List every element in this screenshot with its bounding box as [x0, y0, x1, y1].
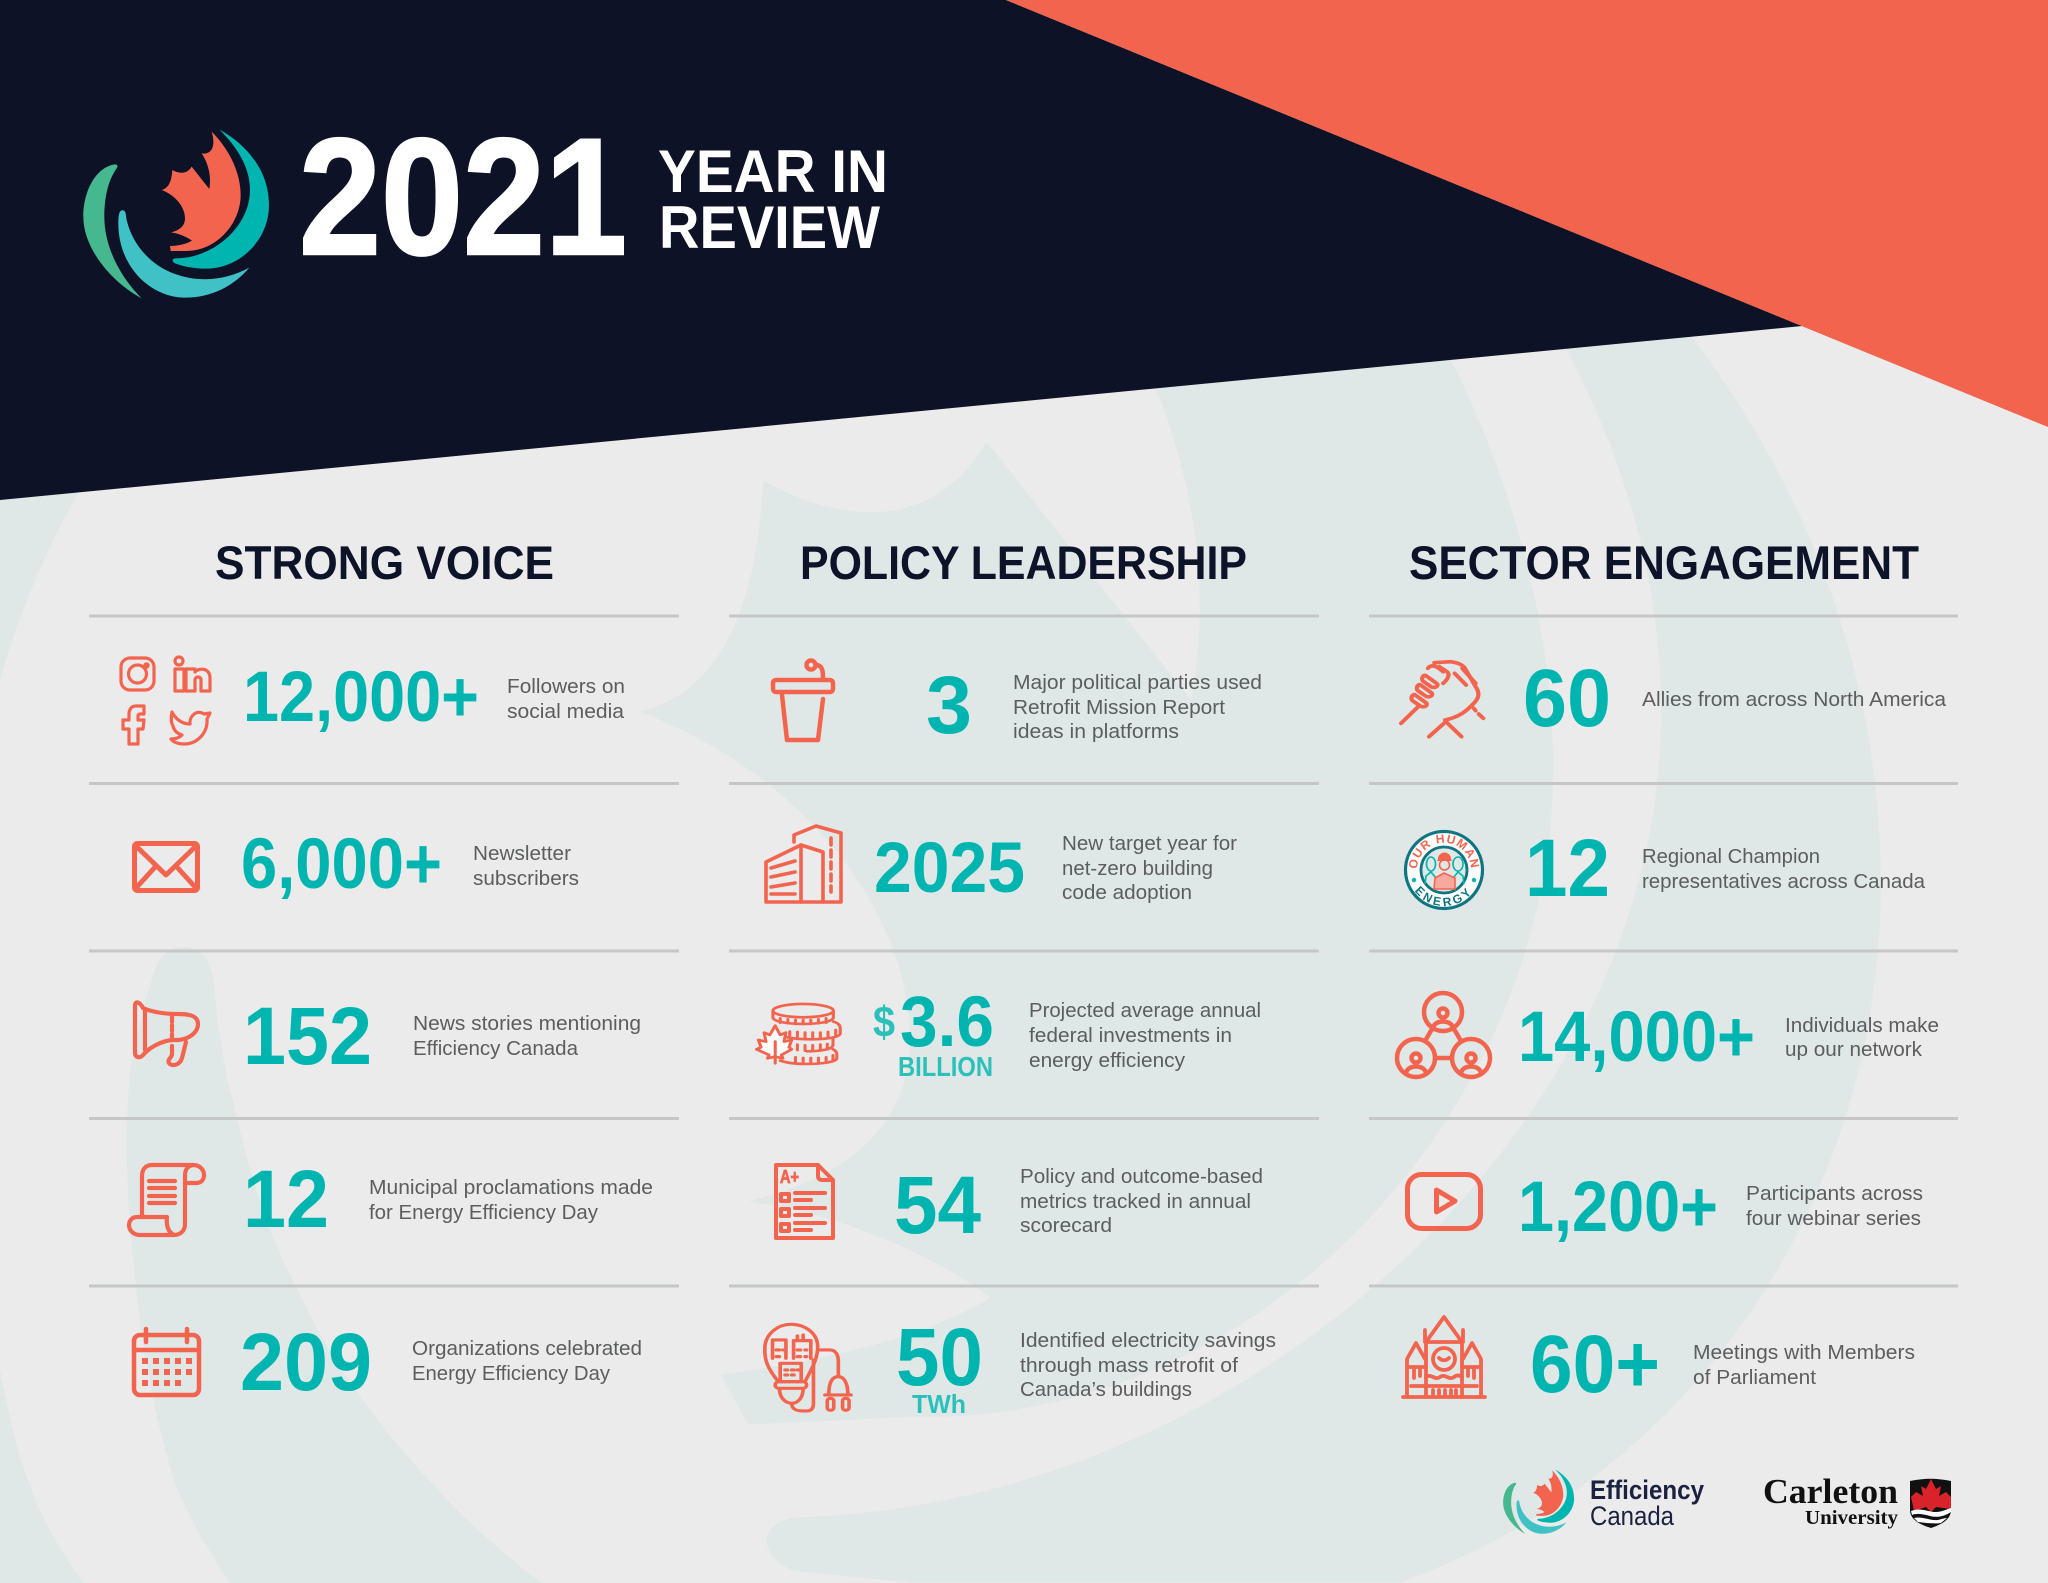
footer logo: efficiency canada: Canada — [1590, 1501, 1675, 1531]
description: Municipal proclamations made — [369, 1176, 653, 1199]
row: allies — [1401, 653, 1947, 744]
icon: calendar — [134, 1329, 199, 1395]
icon: network of people — [1397, 993, 1490, 1077]
icon: coins with maple leaf — [756, 1004, 840, 1064]
description: Efficiency Canada — [413, 1037, 579, 1060]
title: year in review: REVIEW — [659, 194, 880, 261]
number: 12 — [1525, 823, 1610, 914]
description: of Parliament — [1693, 1366, 1816, 1389]
description — [473, 842, 579, 890]
icon: scroll — [129, 1165, 204, 1235]
icon: our human energy badge: OUR HUMAN — [1409, 834, 1480, 868]
description: Individuals make — [1785, 1014, 1939, 1037]
description — [1693, 1341, 1915, 1389]
description — [1020, 1329, 1276, 1401]
icon: parliament building — [1403, 1317, 1485, 1397]
number: 3 — [926, 660, 972, 751]
row: newsletter — [134, 825, 579, 904]
unit: dollar sign: $ — [873, 998, 895, 1047]
row: target year — [766, 826, 1237, 908]
row: political parties — [773, 660, 1262, 751]
icon: envelope — [134, 844, 198, 890]
number: 209 — [240, 1317, 372, 1408]
row: webinars — [1408, 1168, 1923, 1247]
description: metrics tracked in annual — [1020, 1190, 1251, 1213]
number: 60 — [1523, 653, 1611, 744]
description — [1020, 1165, 1263, 1237]
number: 54 — [894, 1160, 981, 1251]
description — [369, 1176, 653, 1224]
description: net-zero building — [1062, 857, 1213, 880]
description: representatives across Canada — [1642, 870, 1926, 893]
icon: report card — [776, 1165, 833, 1238]
description: Projected average annual — [1029, 999, 1261, 1022]
description — [413, 1012, 641, 1060]
description — [1029, 999, 1261, 1072]
description: Energy Efficiency Day — [412, 1362, 611, 1385]
icon: building — [766, 826, 841, 902]
heading: policy leadership: POLICY LEADERSHIP — [800, 537, 1247, 590]
unit: TWh: TWh — [912, 1389, 966, 1419]
description: Identified electricity savings — [1020, 1329, 1276, 1352]
icon: clasped hands — [1401, 662, 1483, 737]
icon: video play — [1408, 1174, 1480, 1228]
unit: billion: BILLION — [898, 1051, 993, 1082]
description — [507, 675, 625, 723]
description: ideas in platforms — [1013, 720, 1179, 743]
description: code adoption — [1062, 881, 1192, 904]
panel: strong voice — [89, 537, 679, 1408]
title: year in review — [658, 138, 888, 261]
row: parliament — [1403, 1317, 1915, 1410]
description: subscribers — [473, 867, 579, 890]
header orange triangle — [1006, 0, 2048, 427]
header dark banner — [0, 0, 1802, 500]
row: network — [1397, 993, 1939, 1077]
footer logo: efficiency canada — [1503, 1469, 1704, 1534]
row: followers — [121, 657, 625, 744]
heading: sector engagement: SECTOR ENGAGEMENT — [1409, 537, 1919, 590]
description: federal investments in — [1029, 1024, 1232, 1047]
row: news stories — [135, 991, 641, 1082]
title: 2021: 2021 — [299, 105, 627, 290]
footer logo: carleton university: Carleton — [1763, 1472, 1898, 1511]
description: for Energy Efficiency Day — [369, 1201, 599, 1224]
icon: podium — [773, 660, 833, 740]
number: 12 — [243, 1154, 329, 1245]
description: Organizations celebrated — [412, 1337, 642, 1360]
description: up our network — [1785, 1038, 1923, 1061]
icon: report card: A+ — [780, 1167, 799, 1187]
icon: our human energy badge — [1404, 830, 1484, 910]
description: Meetings with Members — [1693, 1341, 1915, 1364]
description: social media — [507, 700, 625, 723]
description — [1785, 1014, 1939, 1061]
number: 152 — [243, 991, 372, 1082]
panel: sector engagement — [1369, 537, 1958, 1410]
description: Allies from across North America — [1642, 688, 1947, 711]
description: energy efficiency — [1029, 1049, 1186, 1072]
icon: our human energy badge: ENERGY — [1414, 886, 1470, 906]
footer logo: efficiency canada: Efficiency — [1590, 1475, 1704, 1505]
number: 6,000+ — [241, 825, 442, 904]
number: 12,000+ — [243, 658, 479, 737]
description: Followers on — [507, 675, 625, 698]
description — [1062, 832, 1237, 904]
number: 50 — [896, 1312, 983, 1403]
description: Canada’s buildings — [1020, 1378, 1192, 1401]
description — [412, 1337, 642, 1385]
description: New target year for — [1062, 832, 1237, 855]
description: through mass retrofit of — [1020, 1354, 1238, 1377]
heading: strong voice: STRONG VOICE — [215, 537, 554, 590]
row: federal investment — [756, 983, 1261, 1082]
icon: social media — [121, 657, 210, 744]
description: News stories mentioning — [413, 1012, 641, 1035]
description: Regional Champion — [1642, 845, 1820, 868]
number: 2025 — [874, 829, 1025, 908]
footer logo: carleton university — [1763, 1472, 1951, 1529]
description: Major political parties used — [1013, 671, 1262, 694]
description — [1642, 845, 1926, 893]
panel: policy leadership — [729, 537, 1319, 1419]
row: organizations — [134, 1317, 642, 1408]
icon: megaphone — [135, 1002, 198, 1065]
row: electricity savings — [765, 1312, 1276, 1419]
description: Retrofit Mission Report — [1013, 696, 1225, 719]
footer logo: carleton university: University — [1805, 1507, 1898, 1529]
title: year in review: YEAR IN — [658, 138, 888, 205]
row: regional champions — [1404, 823, 1926, 914]
number: 14,000+ — [1518, 998, 1755, 1077]
number: 3.6 — [900, 983, 994, 1062]
row: scorecard — [776, 1160, 1263, 1251]
description: Newsletter — [473, 842, 571, 865]
number: 60+ — [1530, 1319, 1660, 1410]
description — [1746, 1182, 1923, 1230]
icon: light bulb with plug — [765, 1324, 851, 1411]
description: scorecard — [1020, 1214, 1112, 1237]
description: Policy and outcome-based — [1020, 1165, 1263, 1188]
header logo — [83, 129, 269, 298]
number: 1,200+ — [1518, 1168, 1718, 1247]
row: proclamations — [129, 1154, 653, 1245]
description: Participants across — [1746, 1182, 1923, 1205]
description — [1013, 671, 1262, 743]
description: four webinar series — [1746, 1207, 1921, 1230]
